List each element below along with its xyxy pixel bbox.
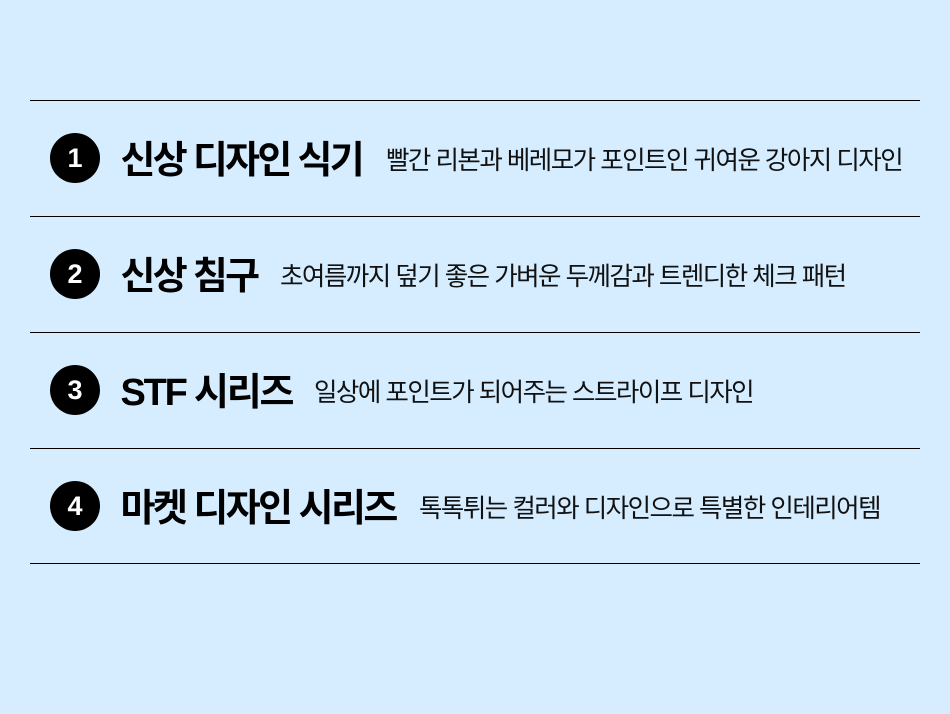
description 2: 초여름까지 덮기 좋은 가벼운 두께감과 트렌디한 체크 패턴 [280, 256, 846, 293]
item 2 [50, 249, 846, 299]
heading 1: 신상 디자인 식기 [120, 140, 362, 182]
number badge 4 [50, 481, 100, 531]
number badge 3 [50, 365, 100, 415]
item 4 [50, 481, 880, 531]
number badge 4: 4 [67, 491, 83, 521]
number badge 1: 1 [67, 143, 83, 173]
heading 3: STF 시리즈 [120, 372, 292, 414]
number badge 2 [50, 249, 100, 299]
description 3: 일상에 포인트가 되어주는 스트라이프 디자인 [314, 372, 753, 409]
number badge 1 [50, 133, 100, 183]
item 3 [50, 365, 753, 415]
heading 4: 마켓 디자인 시리즈 [120, 488, 396, 530]
number badge 3: 3 [67, 375, 83, 405]
heading 2: 신상 침구 [120, 256, 257, 298]
item 1 [50, 133, 902, 183]
description 4: 톡톡튀는 컬러와 디자인으로 특별한 인테리어템 [419, 488, 880, 525]
description 1: 빨간 리본과 베레모가 포인트인 귀여운 강아지 디자인 [386, 140, 902, 177]
number badge 2: 2 [67, 259, 83, 289]
